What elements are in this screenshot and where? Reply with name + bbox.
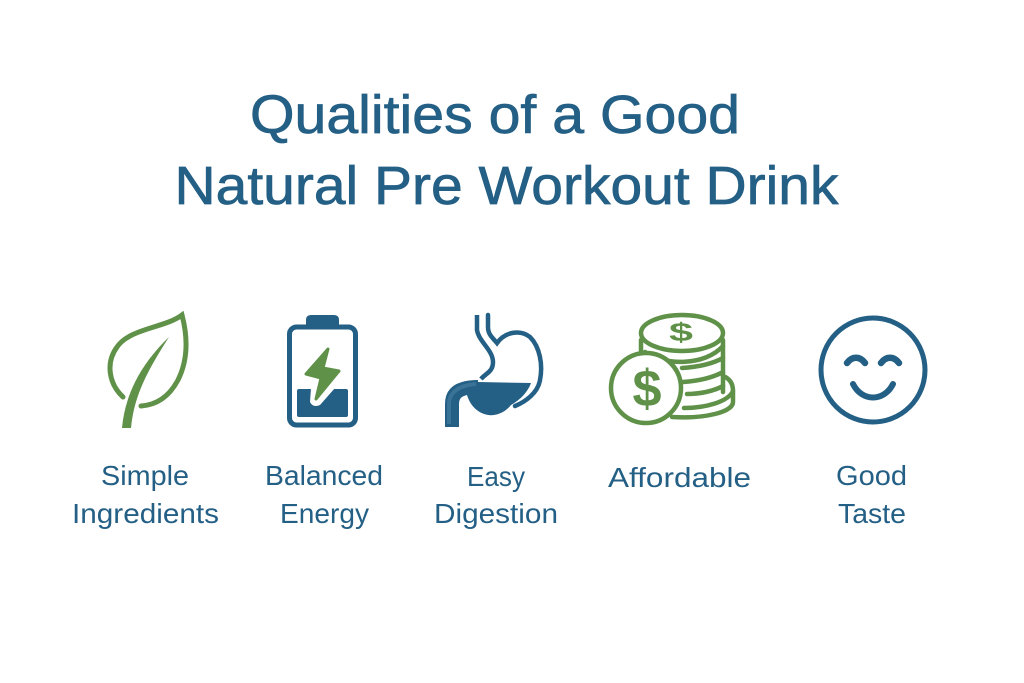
icon: battery: [290, 315, 356, 425]
icon: coins: [611, 315, 733, 423]
label: easy digestion: Digestion: [434, 498, 558, 529]
label: good taste: Taste: [838, 498, 906, 529]
label: simple ingredients: Ingredients: [72, 498, 219, 529]
label: simple ingredients: Simple: [101, 460, 189, 491]
label: balanced energy: Balanced: [265, 460, 383, 491]
icon: coins: $: [669, 317, 694, 347]
label: balanced energy: [265, 460, 383, 529]
title: Natural Pre Workout Drink: [174, 156, 840, 216]
icon: coins: $: [632, 360, 662, 418]
label: balanced energy: Energy: [280, 498, 369, 529]
label: good taste: Good: [836, 460, 907, 491]
label: simple ingredients: [72, 460, 219, 529]
label: good taste: [836, 460, 907, 529]
label: easy digestion: [434, 461, 558, 529]
title: Qualities of a Good: [250, 85, 740, 145]
icon: leaf: [110, 315, 186, 428]
label: easy digestion: Easy: [467, 461, 525, 492]
icon: smiley: [821, 318, 925, 422]
title: [174, 85, 840, 216]
label: affordable: Affordable: [608, 462, 751, 493]
icon: stomach: [449, 315, 541, 427]
